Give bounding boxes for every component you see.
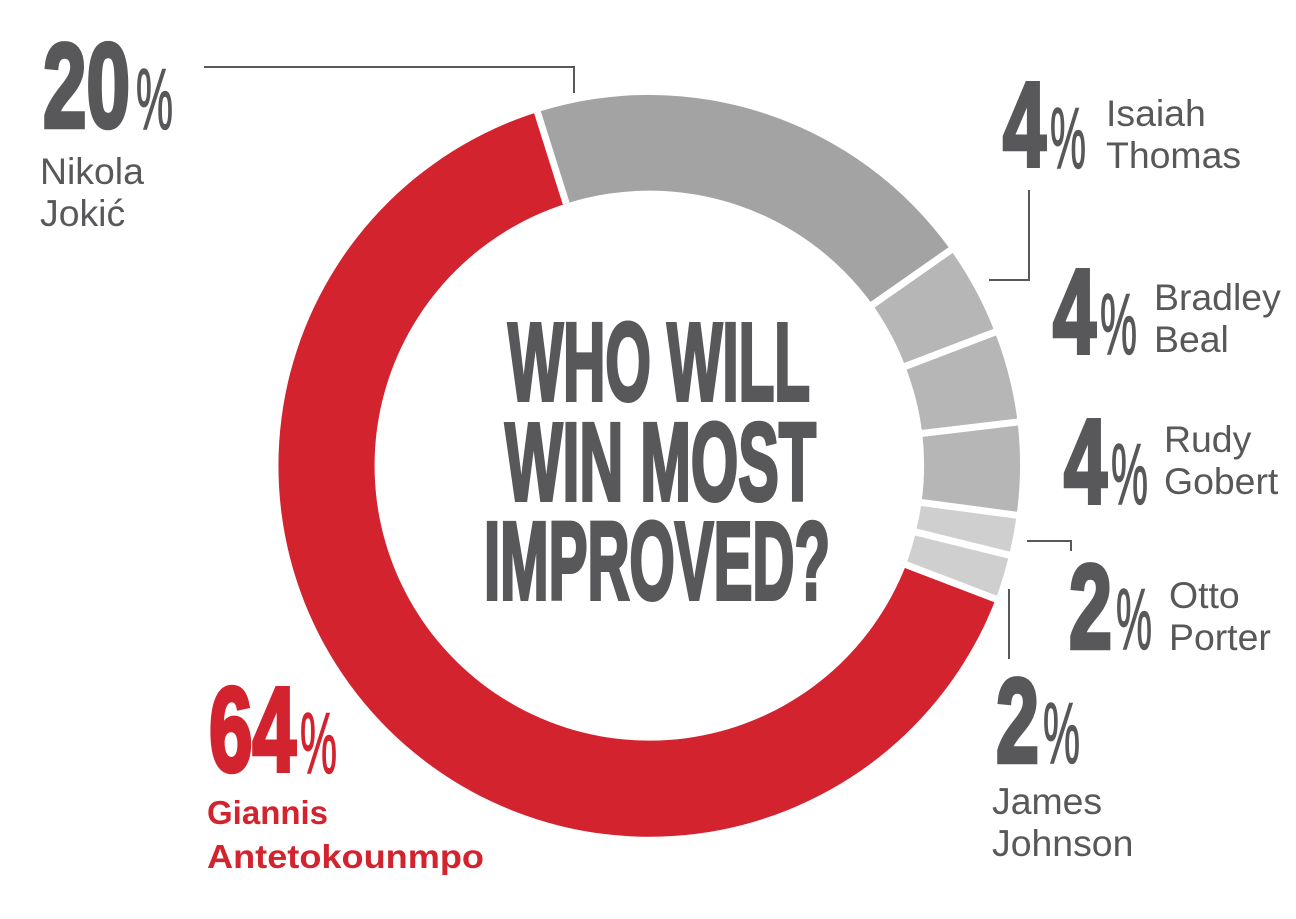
connector: Isaiah Thomas (989, 190, 1029, 280)
label: Rudy Gobert 4%: 4 (1064, 395, 1107, 529)
title: WHO WILL (508, 301, 810, 424)
donut chart (278, 95, 1020, 837)
label: Nikola Jokic 20%: Jokić (40, 192, 125, 234)
label: James Johnson 2%: Johnson (992, 822, 1133, 864)
label: Otto Porter 2%: Porter (1169, 616, 1271, 658)
segment: Giannis Antetokounmpo 64% (278, 112, 996, 837)
label: Giannis Antetokounmpo 64%: Giannis (207, 794, 328, 831)
label: Giannis Antetokounmpo 64% (207, 663, 484, 875)
text: % (136, 52, 173, 148)
label: James Johnson 2%: % (1043, 686, 1080, 782)
segment: Isaiah Thomas 4% (873, 250, 995, 366)
label: Otto Porter 2%: Otto (1169, 574, 1240, 616)
label: Rudy Gobert 4% (1064, 395, 1279, 529)
label: James Johnson 2%: James (992, 780, 1102, 822)
label: James Johnson 2% (992, 654, 1133, 864)
title: WIN MOST (505, 401, 816, 524)
label: Bradley Beal 4%: 4 (1053, 245, 1096, 379)
connector: Otto Porter (1027, 541, 1071, 551)
label: Nikola Jokic 20%: Nikola (40, 150, 144, 192)
label: James Johnson 2%: 2 (996, 654, 1039, 788)
label: Isaiah Thomas 4%: % (1050, 91, 1086, 187)
label: Nikola Jokic 20%: 20 (43, 19, 130, 153)
label: Bradley Beal 4%: Beal (1154, 318, 1229, 360)
segment: Nikola Jokic 20% (537, 95, 951, 305)
label: Bradley Beal 4%: % (1100, 277, 1137, 373)
label: Bradley Beal 4% (1053, 245, 1281, 379)
label: Otto Porter 2%: 2 (1069, 540, 1112, 674)
connector: James Johnson (1008, 589, 1010, 659)
segment dividers (537, 112, 1019, 599)
label: Rudy Gobert 4%: Gobert (1164, 460, 1279, 502)
label: Giannis Antetokounmpo 64%: Antetokounmpo (207, 838, 484, 875)
segment: Otto Porter 2% (916, 502, 1017, 555)
label: Rudy Gobert 4%: % (1111, 427, 1148, 523)
label: Otto Porter 2% (1069, 540, 1271, 674)
segment: Rudy Gobert 4% (922, 422, 1020, 515)
label: Isaiah Thomas 4% (1003, 58, 1241, 192)
segment: Bradley Beal 4% (905, 332, 1018, 433)
label: Rudy Gobert 4%: Rudy (1164, 418, 1252, 460)
label: Nikola Jokic 20% (40, 19, 173, 234)
label: Otto Porter 2%: % (1116, 572, 1152, 668)
label: Giannis Antetokounmpo 64%: 64 (209, 663, 296, 797)
title (484, 301, 830, 623)
label: Isaiah Thomas 4%: Thomas (1106, 134, 1241, 176)
segment: James Johnson 2% (906, 532, 1009, 599)
label: Bradley Beal 4%: Bradley (1154, 276, 1281, 318)
title: IMPROVED? (484, 500, 830, 623)
label: Isaiah Thomas 4%: 4 (1003, 58, 1046, 192)
label: Isaiah Thomas 4%: Isaiah (1106, 92, 1206, 134)
connector: Nikola Jokic (204, 67, 574, 93)
label: Giannis Antetokounmpo 64%: % (300, 696, 337, 792)
